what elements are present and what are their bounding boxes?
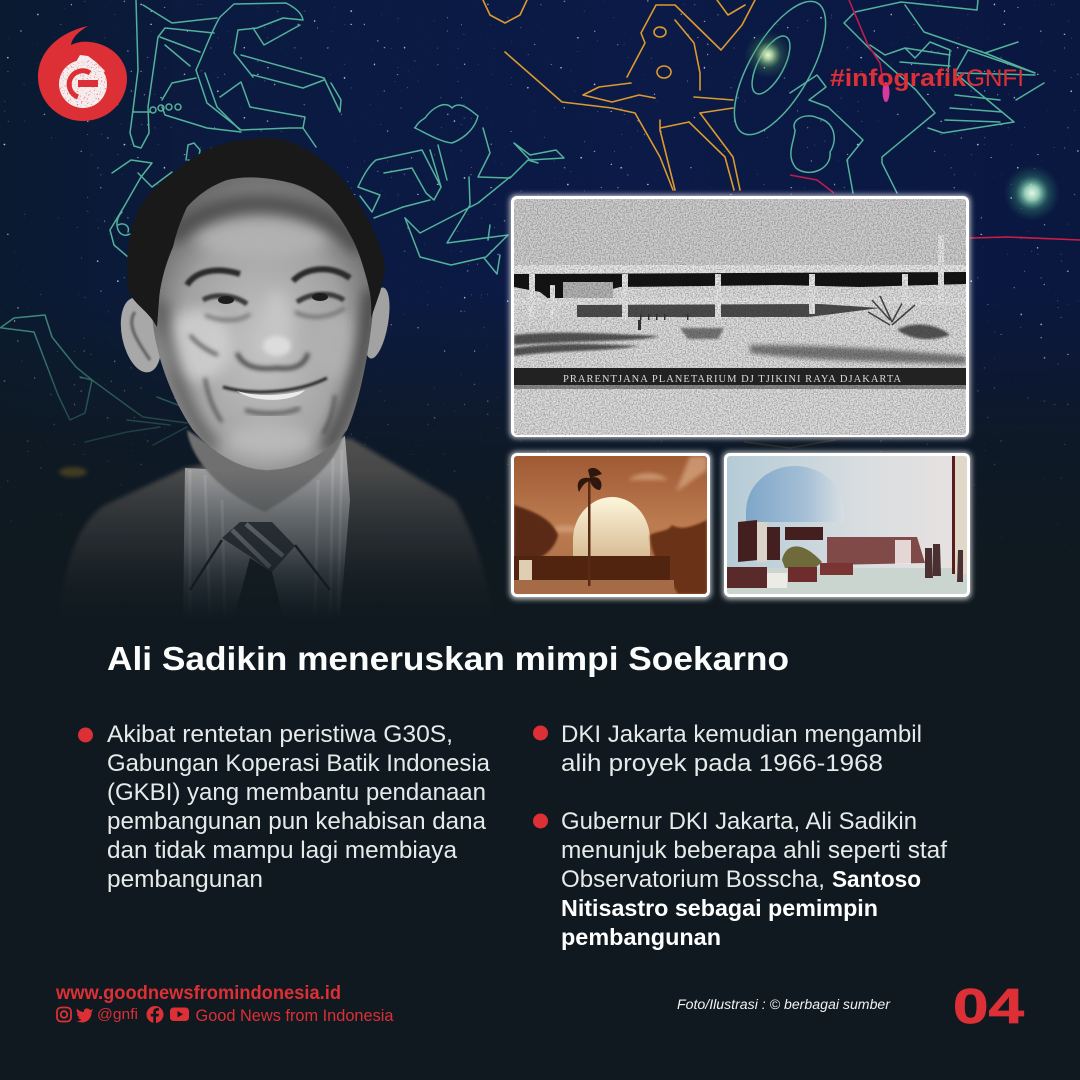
constellation: small figure left of head (110, 143, 200, 257)
constellation: orange figure (483, 0, 835, 448)
left column bullet: pembangunan pun kehabisan dana (107, 808, 487, 835)
left column bullet: Akibat rentetan peristiwa G30S, (107, 721, 453, 748)
hashtag: GNFI (966, 65, 1024, 92)
portrait: Ali Sadikin (60, 138, 492, 625)
footer website: www.goodnewsfromindonesia.id (55, 983, 341, 1004)
constellation: top-left figure (130, 0, 341, 148)
jacket (60, 438, 492, 625)
ears (115, 286, 394, 376)
brows (187, 269, 350, 285)
portrait bottom fade (30, 470, 520, 639)
red constellation lines (790, 0, 1080, 240)
photo: orange dome (510, 452, 711, 599)
constellation: figure above photos (358, 105, 564, 274)
brand name: Good News from Indonesia (196, 1006, 394, 1025)
constellation: right figure with shield (717, 0, 1044, 193)
right column bullet 2: Observatorium Bosscha, (561, 866, 825, 893)
hashtag (830, 65, 1024, 92)
hashtag: #infografik (830, 65, 967, 92)
shirt collar (183, 436, 350, 620)
photo credit: Foto/Ilustrasi : © berbagai sumber (677, 997, 891, 1012)
left column bullet: (GKBI) yang membantu pendanaan (107, 779, 486, 806)
tie (222, 522, 295, 625)
right column bullet 1 (533, 721, 922, 777)
eyes (203, 294, 344, 304)
faint orange constellation remnant (59, 467, 87, 477)
right column bullet 2: pembangunan (561, 924, 721, 950)
icon: instagram (57, 1008, 71, 1022)
left column bullet: dan tidak mampu lagi membiaya (107, 837, 458, 864)
photo: planetarium sketch (510, 195, 970, 438)
page number: 04 (953, 980, 1024, 1034)
sketch caption: PRARENTJANA PLANETARIUM DJ TJIKINI RAYA DJAKARTA (563, 374, 901, 385)
glowing stars (744, 31, 1060, 221)
right column bullet 2: Nitisastro sebagai pemimpin (561, 895, 878, 921)
right column bullet 2: Gubernur DKI Jakarta, Ali Sadikin (561, 808, 917, 835)
left column bullet: Gabungan Koperasi Batik Indonesia (107, 750, 491, 777)
right column bullet 1: DKI Jakarta kemudian mengambil (561, 721, 922, 748)
sky fade into dark background (0, 290, 1080, 580)
constellation: bottom-left figure (0, 315, 187, 445)
icon: twitter (76, 1008, 93, 1022)
face (152, 160, 374, 470)
icon: youtube (170, 1008, 189, 1021)
right column bullet 2: menunjuk beberapa ahli seperti staf (561, 837, 947, 864)
right column bullet 2 (533, 808, 947, 950)
nose (237, 353, 308, 369)
icon: facebook (146, 1006, 164, 1023)
hair (127, 138, 385, 327)
mouth (223, 378, 327, 392)
footer social icons (57, 1006, 394, 1025)
handle: @gnfi (97, 1006, 138, 1023)
right column bullet 2: Santoso (832, 866, 921, 892)
neck (187, 430, 345, 512)
right column bullet 1: alih proyek pada 1966-1968 (561, 750, 883, 777)
title: Ali Sadikin meneruskan mimpi Soekarno (107, 640, 789, 677)
left column bullet (78, 721, 491, 893)
logo: GNFI (38, 26, 127, 121)
left column bullet: pembangunan (107, 866, 263, 893)
photo: blue dome (723, 452, 971, 599)
